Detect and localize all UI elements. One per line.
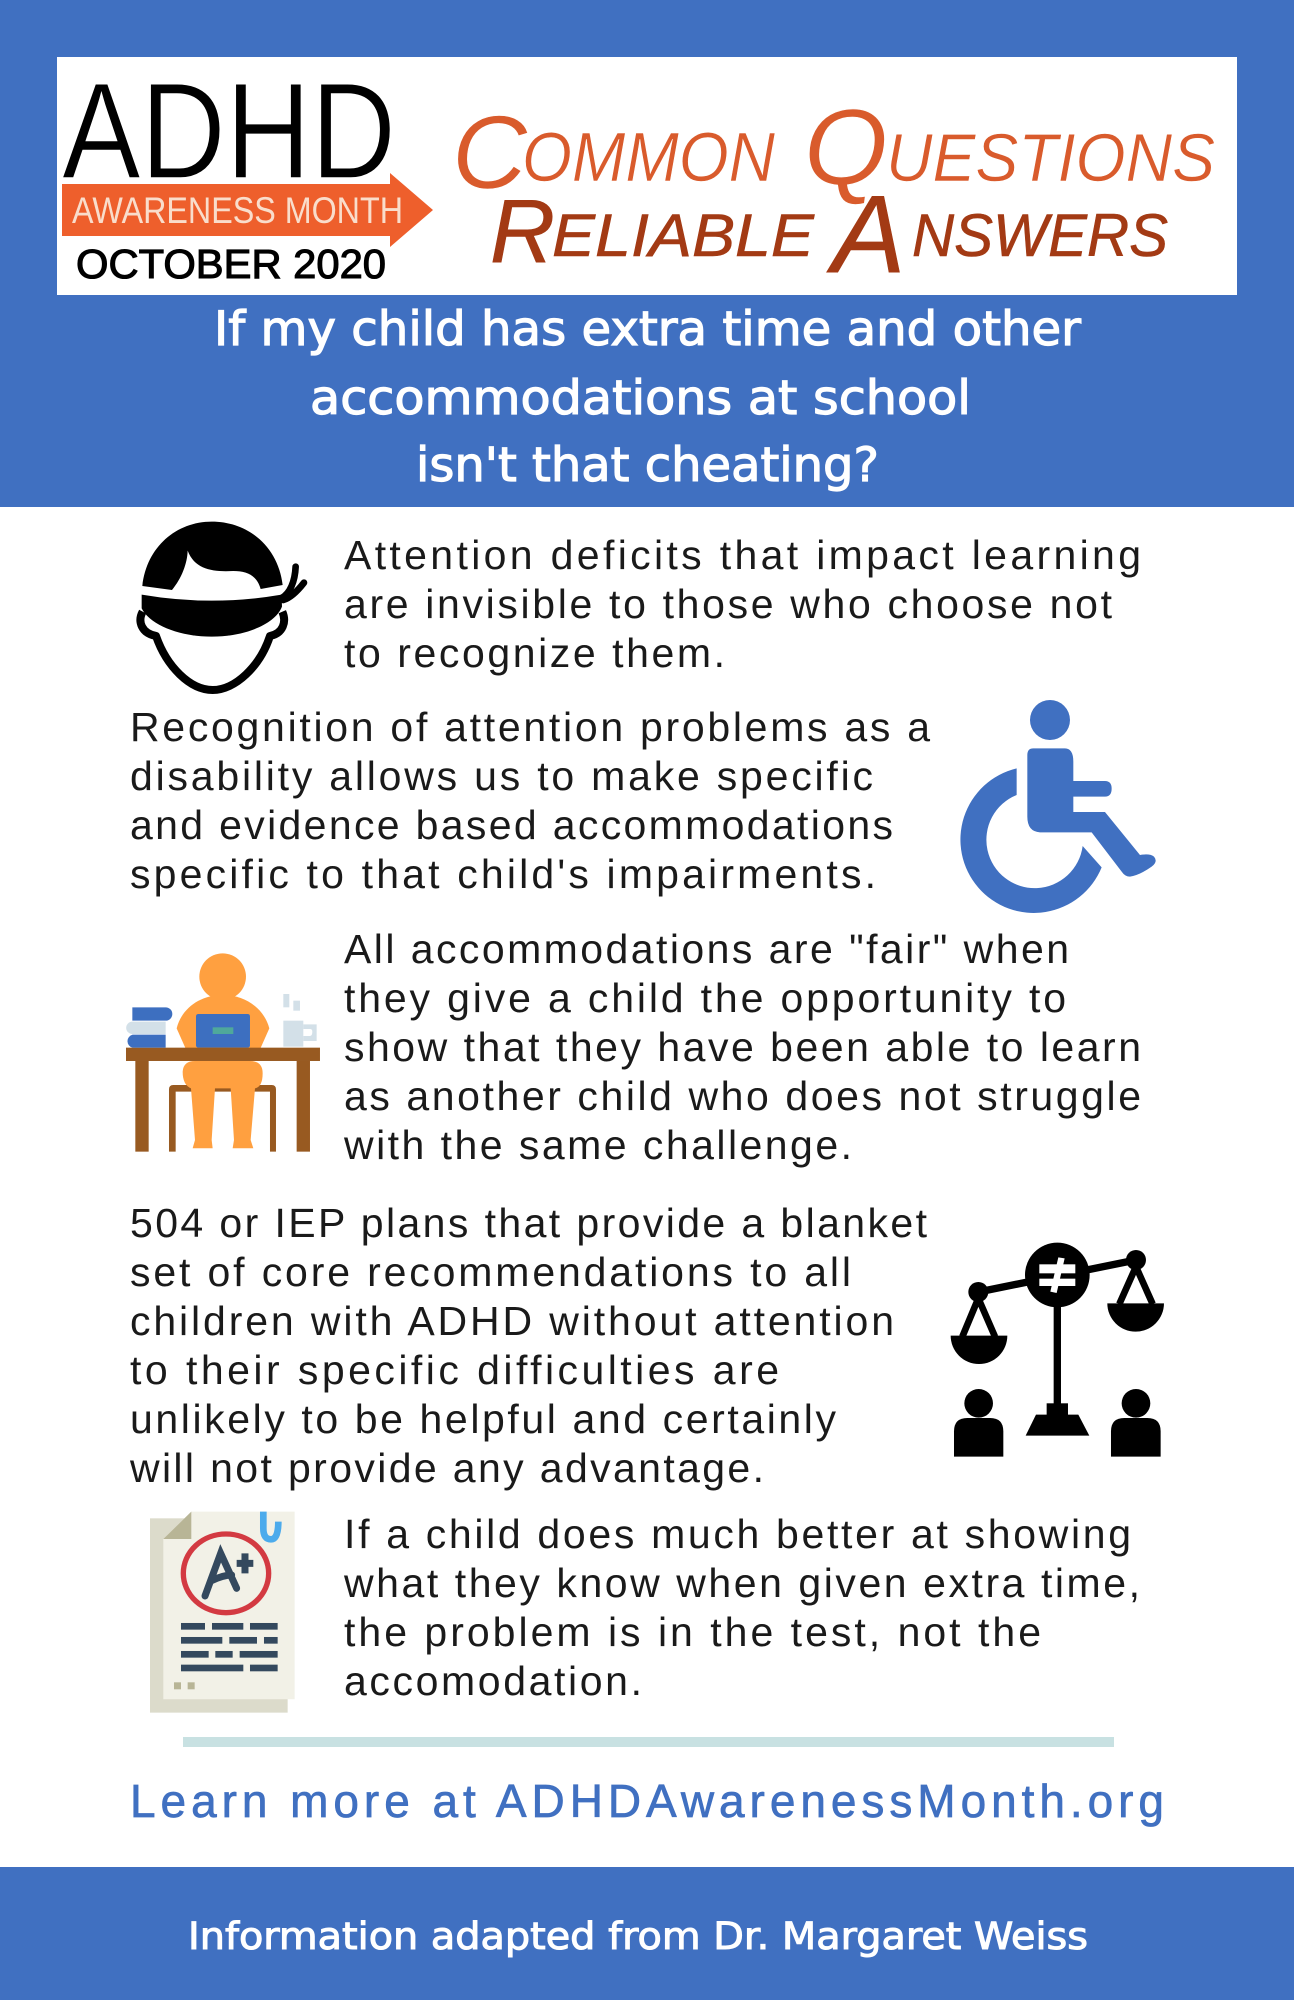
text block: recognition of disability bbox=[130, 704, 930, 897]
banner title: reliable answers: NSWERS bbox=[912, 202, 1168, 269]
text block: extra time and the test bbox=[343, 1511, 1140, 1704]
banner title: common questions: Q bbox=[804, 86, 888, 207]
chair bbox=[169, 1085, 276, 1152]
top blue panel bbox=[0, 0, 1294, 507]
text block: attention deficits bbox=[344, 532, 1141, 676]
orange arrow with awareness month bbox=[62, 173, 433, 247]
text block: attention deficits: Attention deficits that impact learning bbox=[344, 532, 1141, 578]
text block: 504 or IEP plans: children with ADHD without attention bbox=[130, 1298, 894, 1344]
text block: extra time and the test: what they know when given extra time, bbox=[343, 1560, 1140, 1606]
laptop bbox=[196, 1014, 250, 1048]
mug and steam bbox=[283, 994, 317, 1047]
banner title: reliable answers bbox=[490, 173, 1168, 296]
main question heading: isn't that cheating? bbox=[416, 438, 879, 493]
text block: extra time and the test: If a child does much better at showing bbox=[344, 1511, 1131, 1557]
text block: 504 or IEP plans bbox=[129, 1200, 928, 1491]
paper clip bbox=[263, 1512, 278, 1539]
text block: 504 or IEP plans: 504 or IEP plans that provide a blanket bbox=[130, 1200, 928, 1246]
text block: extra time and the test: the problem is in the test, not the bbox=[344, 1609, 1041, 1655]
banner title: reliable answers: A bbox=[826, 173, 905, 296]
icon: student at desk bbox=[126, 953, 320, 1152]
main question heading: If my child has extra time and other bbox=[214, 302, 1082, 357]
banner title: common questions: OMMON bbox=[522, 118, 775, 196]
footer band with attribution: Information adapted from Dr. Margaret Weiss bbox=[188, 1915, 1088, 1958]
person bbox=[177, 953, 269, 1148]
banner title: common questions: C bbox=[452, 95, 528, 211]
footer band with attribution bbox=[0, 1867, 1294, 2000]
text block: 504 or IEP plans: will not provide any advantage. bbox=[129, 1445, 764, 1491]
text block: recognition of disability: disability allows us to make specific bbox=[130, 753, 873, 799]
icon: unequal scales and two people bbox=[951, 1243, 1164, 1457]
ADHD wordmark: ADHD bbox=[62, 55, 396, 208]
text block: fair accommodations: as another child who does not struggle bbox=[344, 1073, 1141, 1119]
text block: 504 or IEP plans: to their specific difficulties are bbox=[130, 1347, 779, 1393]
call to action link: Learn more at ADHDAwarenessMonth.org bbox=[130, 1775, 1164, 1827]
banner title: reliable answers: ELIABLE bbox=[552, 202, 815, 269]
header logo banner bbox=[57, 55, 1237, 296]
red circle grade bbox=[183, 1534, 269, 1613]
text block: fair accommodations bbox=[343, 926, 1141, 1168]
text block: fair accommodations: All accommodations are "fair" when bbox=[344, 926, 1069, 972]
text block: recognition of disability: Recognition of attention problems as a bbox=[130, 704, 930, 750]
orange arrow with awareness month: AWARENESS MONTH bbox=[72, 190, 403, 231]
icon: blindfolded head bbox=[140, 522, 304, 690]
banner title: reliable answers: R bbox=[490, 182, 555, 282]
icon: wheelchair bbox=[960, 700, 1156, 913]
paper bbox=[150, 1512, 295, 1713]
text block: recognition of disability: and evidence based accommodations bbox=[130, 802, 893, 848]
text block: fair accommodations: they give a child the opportunity to bbox=[344, 975, 1066, 1021]
banner title: common questions: UESTIONS bbox=[886, 120, 1215, 196]
text lines on paper bbox=[181, 1623, 278, 1671]
banner title: common questions bbox=[452, 86, 1215, 211]
text block: 504 or IEP plans: set of core recommendations to all bbox=[130, 1249, 851, 1295]
text block: 504 or IEP plans: unlikely to be helpful and certainly bbox=[130, 1396, 836, 1442]
main question heading bbox=[214, 302, 1082, 493]
desk bbox=[126, 1048, 320, 1152]
text block: extra time and the test: accomodation. bbox=[344, 1658, 642, 1704]
A+ mark bbox=[205, 1553, 253, 1596]
october 2020 date: OCTOBER 2020 bbox=[76, 241, 386, 287]
text block: attention deficits: are invisible to those who choose not bbox=[344, 581, 1113, 627]
text block: recognition of disability: specific to that child's impairments. bbox=[130, 851, 876, 897]
main question heading: accommodations at school bbox=[310, 371, 971, 426]
books bbox=[126, 1007, 172, 1048]
text block: attention deficits: to recognize them. bbox=[344, 630, 725, 676]
text block: fair accommodations: with the same challenge. bbox=[343, 1122, 852, 1168]
icon: graded test paper A+ bbox=[150, 1512, 295, 1713]
text block: fair accommodations: show that they have been able to learn bbox=[344, 1024, 1141, 1070]
